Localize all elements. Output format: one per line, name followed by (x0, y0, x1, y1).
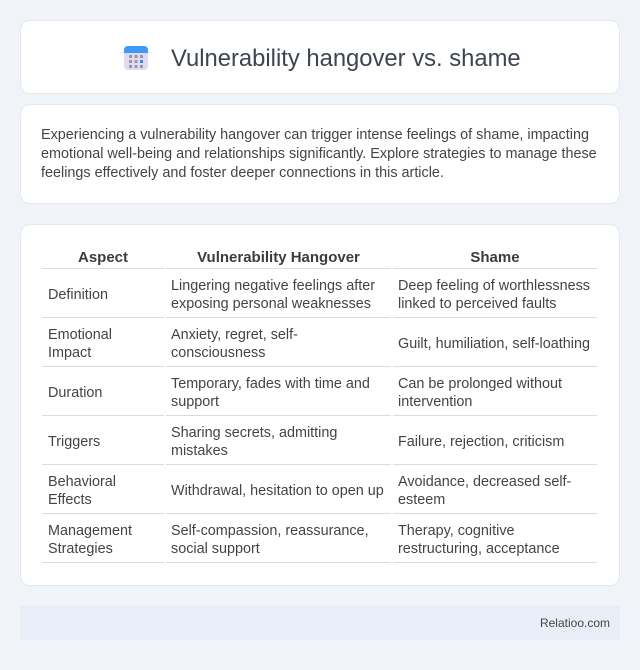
row: Emotional Impact: Emotional (48, 327, 112, 343)
row: Definition: Definition (48, 287, 108, 303)
footer bar (20, 606, 620, 640)
comparison table: restructuring, acceptance (398, 541, 560, 557)
comparison table: Self-compassion, reassurance, (171, 523, 369, 539)
comparison table: Therapy, cognitive (398, 523, 515, 539)
comparison table: mistakes (171, 443, 228, 459)
intro text (41, 127, 597, 181)
comparison table: Effects (48, 492, 92, 508)
comparison table: Sharing secrets, admitting (171, 425, 337, 441)
intro text: feelings effectively and foster deeper connections in this article. (41, 165, 444, 181)
header: Vulnerability Hangover: Vulnerability Hangover (197, 249, 360, 266)
comparison table: intervention (398, 394, 472, 410)
comparison table: esteem (398, 492, 445, 508)
comparison table: Strategies (48, 541, 113, 557)
comparison table: Withdrawal, hesitation to open up (171, 483, 384, 499)
title card (20, 20, 620, 94)
comparison table: social support (171, 541, 260, 557)
title: Vulnerability hangover vs. shame (171, 45, 521, 72)
comparison table: linked to perceived faults (398, 296, 556, 312)
row: Management Strategies: Management (48, 523, 132, 539)
comparison table: Can be prolonged without (398, 376, 562, 392)
row: Duration: Duration (48, 385, 102, 401)
comparison table: Lingering negative feelings after (171, 278, 375, 294)
comparison table: Failure, rejection, criticism (398, 434, 564, 450)
panel: intro (20, 104, 620, 204)
comparison table: Impact (48, 345, 91, 361)
comparison table: consciousness (171, 345, 265, 361)
comparison table: Anxiety, regret, self- (171, 327, 298, 343)
header: Aspect: Aspect (78, 249, 128, 266)
row: Behavioral Effects: Behavioral (48, 474, 116, 490)
row: Triggers: Triggers (48, 434, 100, 450)
comparison table: Temporary, fades with time and (171, 376, 370, 392)
comparison table: Deep feeling of worthlessness (398, 278, 590, 294)
intro text: emotional well-being and relationships significantly. Explore strategies to manage these (41, 146, 597, 162)
comparison table: Avoidance, decreased self- (398, 474, 571, 490)
comparison table: support (171, 394, 219, 410)
comparison table: exposing personal weaknesses (171, 296, 371, 312)
icon: calendar (124, 46, 148, 70)
footer text: Relatioo.com (540, 616, 610, 630)
panel: comparison table (20, 224, 620, 586)
comparison table: Guilt, humiliation, self-loathing (398, 336, 590, 352)
header: Shame: Shame (470, 249, 520, 266)
intro text: Experiencing a vulnerability hangover can trigger intense feelings of shame, impacting (41, 127, 589, 143)
